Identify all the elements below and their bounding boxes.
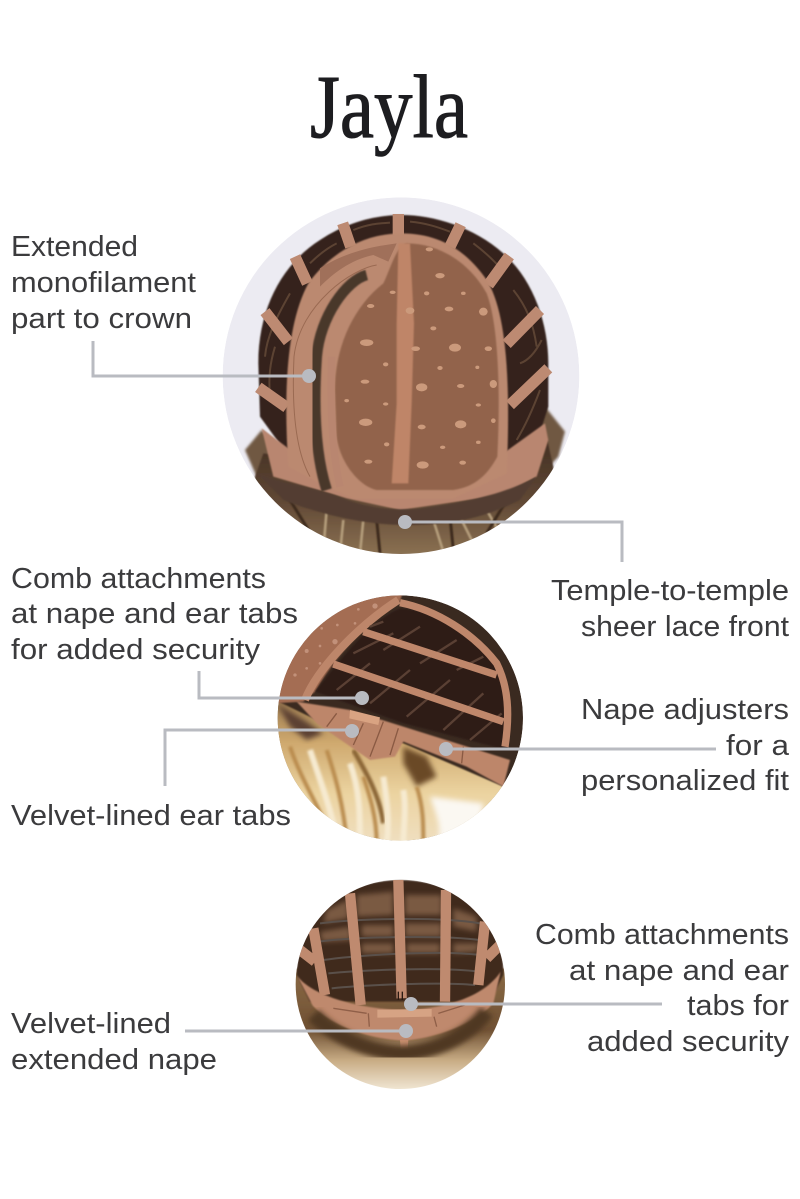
connector: nape adjusters xyxy=(439,742,716,756)
label: comb attachments, nape view xyxy=(535,919,790,1058)
connector: ear tabs xyxy=(165,724,359,786)
dark hair wefts xyxy=(258,215,548,457)
panel: side cap photo, combs and ear tabs xyxy=(275,590,523,843)
circle background xyxy=(278,595,523,841)
label: extended monofilament part xyxy=(11,231,196,335)
label: temple-to-temple lace front: Temple-to-temple xyxy=(551,575,789,607)
upper left mesh xyxy=(320,243,397,287)
horizontal weft lines xyxy=(318,919,480,988)
cap base band xyxy=(262,423,548,510)
hair roots xyxy=(313,1012,487,1053)
label: comb attachments at nape and ear tabs: Comb attachments xyxy=(11,563,266,595)
label: extended monofilament part: monofilament xyxy=(11,267,196,299)
circle background xyxy=(223,198,580,478)
comb tab xyxy=(400,1040,408,1048)
label: comb attachments, nape view: added security xyxy=(587,1026,790,1058)
connector: lace front xyxy=(398,515,622,562)
hair fringe xyxy=(245,407,565,557)
salmon cap stripes xyxy=(333,603,508,747)
centre part strip xyxy=(392,243,414,483)
label: comb attachments, nape view: tabs for xyxy=(687,990,789,1022)
salmon cap stripes xyxy=(300,880,500,1005)
nape adjuster band xyxy=(297,702,510,787)
ear tab seams xyxy=(327,713,463,763)
label: velvet-lined extended nape: Velvet-lined xyxy=(11,1008,171,1040)
label: velvet-lined extended nape xyxy=(11,1008,217,1076)
label: comb attachments, nape view: at nape and ear xyxy=(569,955,789,987)
label: nape adjusters: personalized fit xyxy=(581,765,789,797)
salmon side panel with dots xyxy=(275,590,403,703)
label: comb attachments at nape and ear tabs xyxy=(11,563,298,666)
title: Jayla xyxy=(310,58,468,157)
lighter weft hair xyxy=(320,892,480,953)
connector: velvet nape xyxy=(185,1024,413,1038)
connector: monofilament part xyxy=(93,341,316,383)
weft ridges xyxy=(265,222,542,440)
comb xyxy=(377,1009,432,1018)
label: nape adjusters: for a xyxy=(726,730,790,762)
blonde hair xyxy=(290,968,510,1092)
label: velvet-lined ear tabs: Velvet-lined ear tabs xyxy=(11,800,291,832)
label: extended monofilament part: Extended xyxy=(11,231,138,263)
label: comb attachments, nape view: Comb attachments xyxy=(535,919,789,951)
cap wefts xyxy=(297,880,503,1002)
panel: main cap photo, monofilament part and lace front xyxy=(223,197,579,557)
panel: nape cap photo, combs and velvet nape xyxy=(290,880,510,1092)
weft ridges xyxy=(337,622,502,740)
comb slot xyxy=(398,992,402,1000)
ear tab clip xyxy=(349,710,380,725)
label: temple-to-temple lace front: sheer lace front xyxy=(581,611,789,643)
connector: comb attachments nape xyxy=(404,997,662,1011)
dark hair wefts xyxy=(315,608,510,750)
label: extended monofilament part: part to crown xyxy=(11,303,192,335)
velvet nape band xyxy=(297,972,501,1041)
connector: comb attachments side xyxy=(199,671,369,705)
mesh dots xyxy=(344,247,497,469)
label: comb attachments at nape and ear tabs: at nape and ear tabs xyxy=(11,598,298,630)
lace front xyxy=(275,476,536,526)
label: velvet-lined extended nape: extended nape xyxy=(11,1044,217,1076)
label: comb attachments at nape and ear tabs: for added security xyxy=(11,634,261,666)
nape band seams xyxy=(333,1006,465,1027)
panel dots xyxy=(293,603,378,677)
blonde hair xyxy=(275,700,503,843)
salmon cap stripes xyxy=(258,214,548,407)
side panel edge xyxy=(305,600,398,700)
label: temple-to-temple lace front xyxy=(551,575,789,643)
label: nape adjusters xyxy=(581,694,790,797)
cap centre border xyxy=(285,232,509,454)
monofilament channel xyxy=(293,265,377,490)
label: nape adjusters: Nape adjusters xyxy=(581,694,789,726)
lace mesh panel xyxy=(335,243,499,490)
